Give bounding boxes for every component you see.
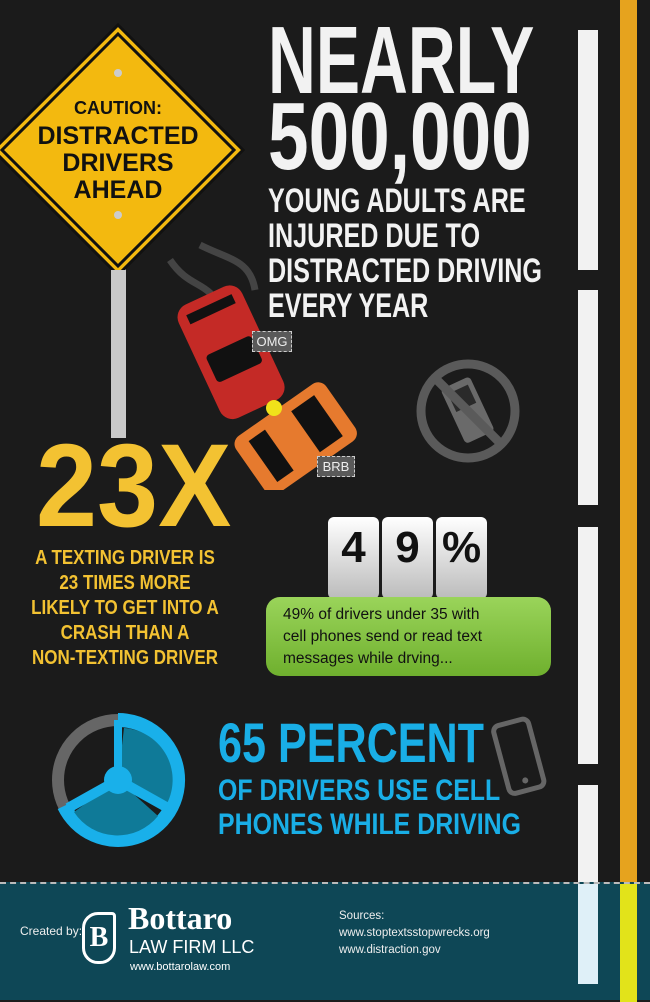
logo: www.bottarolaw.com <box>130 961 230 973</box>
sources <box>339 910 490 956</box>
callout: BRB <box>317 456 355 477</box>
stat: 23x: A TEXTING DRIVER IS <box>35 547 215 569</box>
logo <box>82 900 254 973</box>
headline: nearly 500,000: 500,000 <box>268 83 532 190</box>
icon: caution sign with pole: DISTRACTED <box>37 122 199 150</box>
sources: www.distraction.gov <box>339 944 441 956</box>
text bubble: 49% of drivers under 35 with <box>283 606 479 623</box>
sources: www.stoptextsstopwrecks.org <box>339 927 490 939</box>
sources: Sources: <box>339 910 384 922</box>
logo: LAW FIRM LLC <box>129 937 254 957</box>
icon: caution sign with pole: AHEAD <box>74 176 162 204</box>
stat: 23x <box>31 420 231 669</box>
stat: 23x: CRASH THAN A <box>61 622 189 644</box>
icon: steering wheel pie chart <box>52 713 186 847</box>
text bubble <box>266 597 551 676</box>
stat: 49% tiles: 4 <box>341 523 366 572</box>
text: NON-TEXTING DRIVER <box>32 647 218 669</box>
headline: nearly 500,000: YOUNG ADULTS ARE <box>268 182 526 220</box>
headline: nearly 500,000 <box>268 7 542 325</box>
callout: BRB: BRB <box>323 459 349 474</box>
text bubble: messages while drving... <box>283 650 453 667</box>
stat: 65 percent <box>218 711 521 841</box>
stat: 49% tiles: % <box>442 523 481 572</box>
stat: 49% tiles <box>328 517 487 597</box>
stat: 65 percent: OF DRIVERS USE CELL <box>218 774 500 807</box>
text bubble: cell phones send or read text <box>283 628 482 645</box>
stat: 65 percent: PHONES WHILE DRIVING <box>218 808 521 841</box>
footer <box>0 882 650 1000</box>
callout: OMG <box>252 331 292 352</box>
created by: Created by: <box>20 924 82 938</box>
callout: OMG: OMG <box>256 334 288 349</box>
logo: B <box>90 922 108 953</box>
illustration: crashing cars <box>167 242 357 490</box>
stat: 23x: LIKELY TO GET INTO A <box>31 597 219 619</box>
stat: 65 percent: 65 PERCENT <box>218 711 484 774</box>
icon: caution sign with pole: DRIVERS <box>62 149 174 177</box>
stat: 23x: 23 TIMES MORE <box>59 572 191 594</box>
icon: phone <box>491 716 546 796</box>
logo: Bottaro <box>128 900 232 936</box>
icon: caution sign with pole <box>0 24 244 438</box>
headline: nearly 500,000: EVERY YEAR <box>268 287 428 325</box>
headline: nearly 500,000: DISTRACTED DRIVING <box>268 252 542 290</box>
icon: caution sign with pole: CAUTION: <box>74 98 162 118</box>
stat: 49% tiles: 9 <box>395 523 420 572</box>
icon: no phone <box>416 360 520 462</box>
headline: nearly 500,000: INJURED DUE TO <box>268 217 480 255</box>
stat: 23x: 23X <box>36 420 231 552</box>
headline: nearly 500,000: NEARLY <box>268 7 534 114</box>
